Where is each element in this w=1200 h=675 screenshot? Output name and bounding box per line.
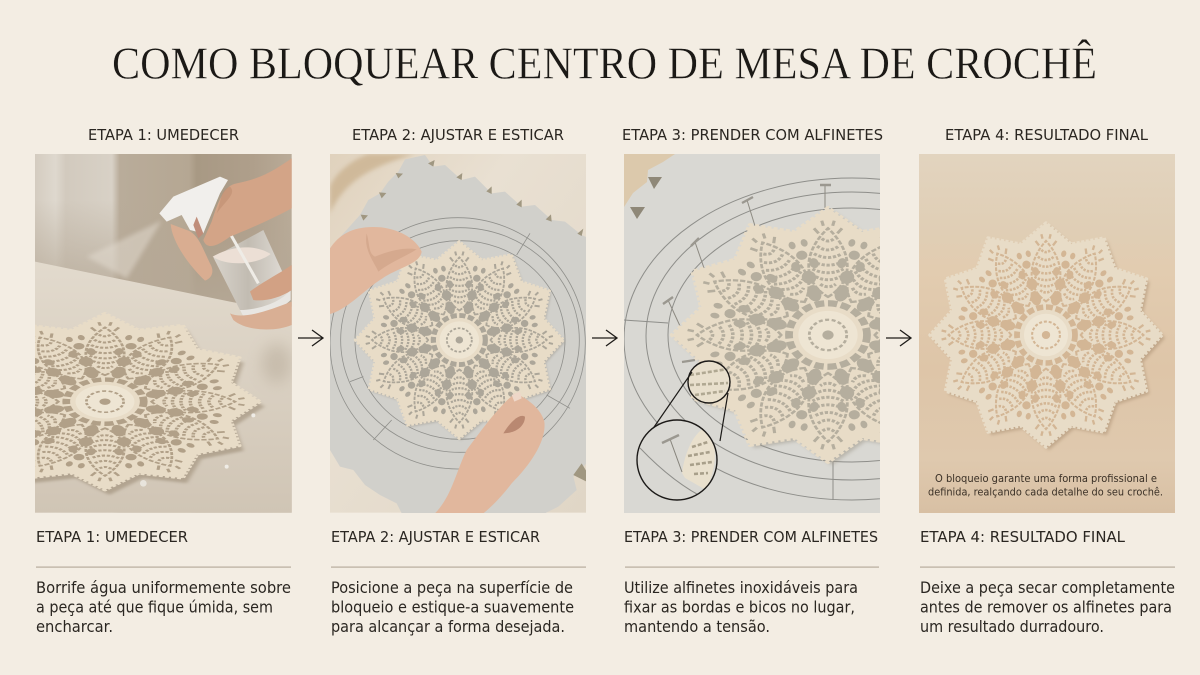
step 1 description: Borrife água uniformemente sobre xyxy=(36,578,291,597)
doily on table xyxy=(35,312,262,492)
step 3 description: Utilize alfinetes inoxidáveis para xyxy=(624,578,858,597)
step 3 photo: pinning doily xyxy=(624,154,880,513)
step 3 description: mantendo a tensão. xyxy=(624,617,770,636)
arrow 2 xyxy=(592,330,617,346)
panel: step 2 xyxy=(330,126,587,636)
step 2 photo: stretching doily on blocking board xyxy=(330,154,587,513)
icon: spray bottle xyxy=(159,177,291,317)
step 2 caption: ETAPA 2: AJUSTAR E ESTICAR xyxy=(331,528,540,546)
photo note xyxy=(928,473,1163,498)
step 4 photo: finished doily on wood xyxy=(919,154,1175,513)
step 4 heading: ETAPA 4: RESULTADO FINAL xyxy=(945,126,1149,144)
step 1 description: a peça até que fique úmida, sem xyxy=(36,598,273,616)
step 2 description: para alcançar a forma desejada. xyxy=(331,617,565,636)
step 4 description: antes de remover os alfinetes para xyxy=(920,598,1172,616)
step 3 heading: ETAPA 3: PRENDER COM ALFINETES xyxy=(622,126,883,144)
step 3 caption: ETAPA 3: PRENDER COM ALFINETES xyxy=(624,528,878,546)
step 2 description: bloqueio e estique-a suavemente xyxy=(331,598,574,616)
magnifier circles xyxy=(637,361,730,505)
arrow 3 xyxy=(886,330,911,346)
step 4 description: um resultado durradouro. xyxy=(920,617,1104,636)
title: COMO BLOQUEAR CENTRO DE MESA DE CROCHÊ xyxy=(112,38,1097,88)
photo note: definida, realçando cada detalhe do seu crochê. xyxy=(928,486,1163,498)
step 4 description: Deixe a peça secar completamente xyxy=(920,578,1175,597)
step 1 heading: ETAPA 1: UMEDECER xyxy=(88,126,239,144)
panel: step 4 xyxy=(919,126,1175,636)
photo note: O bloqueio garante uma forma profissional e xyxy=(935,473,1157,485)
panel: step 1 xyxy=(35,129,292,632)
finished doily xyxy=(930,223,1162,447)
step 3 description xyxy=(624,578,858,636)
step 4 description xyxy=(920,578,1175,636)
arrow 1 xyxy=(298,330,323,346)
step 1 description xyxy=(36,578,291,636)
step 4 caption: ETAPA 4: RESULTADO FINAL xyxy=(920,528,1125,546)
icon: hand holding bottle xyxy=(171,158,292,330)
doily pinned to board xyxy=(670,206,880,464)
step 2 description: Posicione a peça na superfície de xyxy=(331,578,573,597)
doily being stretched xyxy=(355,242,563,438)
step 1 caption: ETAPA 1: UMEDECER xyxy=(36,528,188,546)
step 3 description: fixar as bordas e bicos no lugar, xyxy=(624,598,855,616)
icon: left hand xyxy=(330,227,422,314)
step 1 photo: spraying water on doily xyxy=(35,154,292,513)
icon: right hand xyxy=(435,392,545,513)
step 1 description: encharcar. xyxy=(36,617,113,636)
step 2 heading: ETAPA 2: AJUSTAR E ESTICAR xyxy=(352,126,564,144)
panel: step 3 xyxy=(623,129,882,632)
step 2 description xyxy=(331,578,574,636)
blocking board xyxy=(330,155,587,513)
pins around the edge xyxy=(663,185,831,362)
